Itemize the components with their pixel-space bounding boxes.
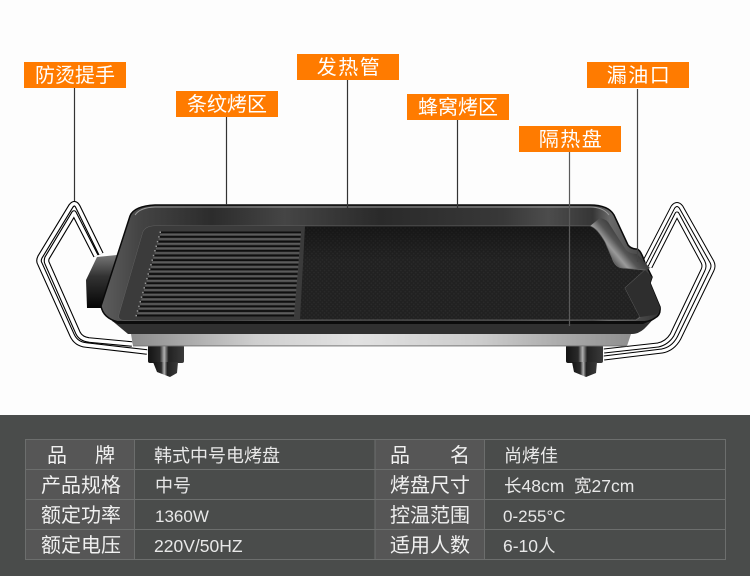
row 2: 产品规格 bbox=[41, 474, 121, 497]
row 3 bbox=[41, 504, 566, 527]
callout: 蜂窝烤区: 蜂窝烤区 bbox=[418, 96, 498, 119]
row 4 bbox=[41, 534, 556, 557]
row 3: 1360W bbox=[155, 507, 209, 526]
row 3: 0-255°C bbox=[503, 507, 566, 526]
specs panel background bbox=[0, 415, 750, 576]
row 1: 品 bbox=[390, 445, 410, 467]
callout: 漏油口: 漏油口 bbox=[607, 64, 671, 87]
row 4: 适用人数 bbox=[390, 534, 470, 557]
front lip bbox=[112, 321, 650, 324]
product: electric grill pan bbox=[39, 204, 713, 377]
row 1: 尚烤佳 bbox=[504, 446, 558, 466]
background bbox=[0, 0, 750, 415]
row 1: 牌 bbox=[95, 444, 115, 467]
callout: 条纹烤区 bbox=[176, 91, 278, 205]
table grid bbox=[25, 439, 726, 560]
ridged grill zone bbox=[119, 226, 305, 320]
row 2 bbox=[41, 474, 634, 497]
callout: 发热管: 发热管 bbox=[317, 56, 381, 79]
rim highlight lines bbox=[135, 207, 609, 215]
left foot bbox=[148, 345, 184, 377]
label column shading bbox=[25, 439, 484, 559]
row 2: 中号 bbox=[155, 476, 191, 496]
callout: 发热管 bbox=[297, 54, 399, 209]
row 4: 6-10人 bbox=[503, 536, 556, 556]
silver band bbox=[131, 334, 631, 346]
right handle bbox=[604, 204, 713, 358]
handle bracket bbox=[86, 255, 117, 308]
right foot bbox=[566, 345, 603, 377]
callout: 防烫提手 bbox=[24, 62, 126, 201]
specs table bbox=[25, 439, 726, 560]
callout: 蜂窝烤区 bbox=[407, 94, 509, 209]
row 2: 长48cm 宽27cm bbox=[504, 476, 634, 496]
row 1: 韩式中号电烤盘 bbox=[154, 446, 280, 466]
callout: 隔热盘 bbox=[519, 126, 621, 326]
row 4: 220V/50HZ bbox=[154, 536, 243, 556]
callout: 漏油口 bbox=[587, 62, 689, 262]
pan rim bbox=[101, 205, 660, 322]
row 2: 烤盘尺寸 bbox=[390, 474, 470, 497]
pan lower body bbox=[104, 313, 659, 334]
surface top shading bbox=[300, 226, 612, 258]
row 4: 额定电压 bbox=[41, 534, 121, 557]
rim right highlight bbox=[590, 218, 650, 271]
row 3: 额定功率 bbox=[41, 504, 121, 527]
cooking surface bbox=[119, 226, 645, 320]
row 3: 控温范围 bbox=[390, 504, 470, 527]
callout: 隔热盘: 隔热盘 bbox=[539, 128, 603, 151]
left handle bbox=[39, 204, 147, 352]
row 1: 品 bbox=[47, 445, 67, 467]
row 1 bbox=[47, 444, 558, 467]
callout: 防烫提手: 防烫提手 bbox=[35, 64, 115, 87]
spout bbox=[625, 270, 660, 317]
row 1: 名 bbox=[450, 444, 470, 467]
callout: 条纹烤区: 条纹烤区 bbox=[187, 93, 267, 116]
